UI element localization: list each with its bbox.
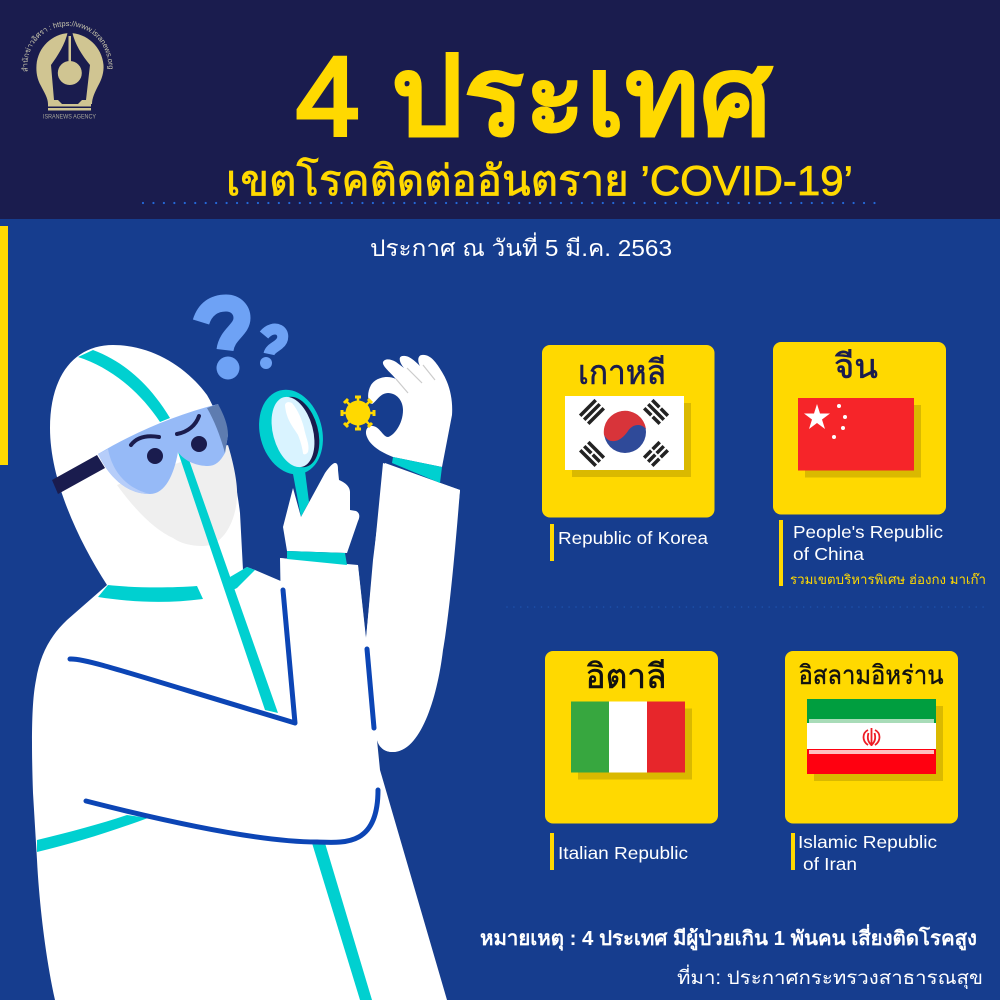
- country name: อิสลามอิหร่าน: [798, 660, 944, 690]
- label: Republic of Korea: [550, 524, 708, 561]
- label: Islamic Republic of Iran: [791, 832, 937, 874]
- dotted divider: [507, 606, 988, 608]
- logo: Isranews Agency: ISRANEWS AGENCY: [43, 114, 97, 120]
- logo: Isranews Agency: สำนักข่าวอิศรา : https://www.isranews.org: [21, 20, 113, 72]
- left accent bar: [0, 226, 8, 465]
- suit body: [32, 463, 460, 1000]
- card: Korea: [542, 345, 714, 518]
- country name: จีน: [834, 348, 878, 386]
- goggles: [52, 404, 228, 494]
- left glove: [283, 463, 359, 565]
- logo: Isranews Agency: [21, 20, 113, 120]
- flag: Italy: [571, 702, 692, 780]
- header band: [0, 0, 1000, 219]
- icon: magnifying glass: [250, 382, 332, 517]
- note: หมายเหตุ : 4 ประเทศ มีผู้ป่วยเกิน 1 พันคน เสี่ยงติดโรคสูง: [480, 923, 977, 952]
- illustration: health worker in protective suit: [32, 345, 460, 1000]
- icon: large question mark: [201, 303, 242, 380]
- card: Italy: [545, 651, 718, 824]
- label: People's Republic of China: รวมเขตบริหารพิเศษ ฮ่องกง มาเก๊า: [790, 572, 986, 587]
- flag: Iran: [807, 699, 943, 781]
- label: Republic of Korea: Republic of Korea: [558, 528, 708, 548]
- country name: เกาหลี: [578, 354, 666, 392]
- icon: virus: [341, 396, 375, 430]
- icon: small question mark: [260, 329, 283, 369]
- label: People's Republic of China: of China: [793, 544, 864, 564]
- announcement date: ประกาศ ณ วันที่ 5 มี.ค. 2563: [370, 232, 672, 261]
- chest strap: [178, 452, 278, 713]
- shoulder strap: [230, 567, 255, 590]
- label: Islamic Republic of Iran: Islamic Republic: [798, 832, 937, 852]
- flag: China: [798, 398, 921, 478]
- label: Islamic Republic of Iran: of Iran: [803, 854, 857, 874]
- label: People's Republic of China: People's Republic: [793, 522, 943, 542]
- left sleeve: [280, 558, 377, 740]
- sleeve seams: [70, 590, 378, 842]
- right glove with OK gesture: [366, 355, 452, 483]
- lower strap: [312, 843, 372, 1000]
- card: Iran: [785, 651, 958, 824]
- source: ที่มา: ประกาศกระทรวงสาธารณสุข: [677, 964, 983, 990]
- hood strap: [78, 350, 170, 422]
- label: Italian Republic: [550, 833, 688, 870]
- hood: [50, 345, 243, 610]
- face mask: [117, 445, 237, 546]
- country name: อิตาลี: [586, 658, 666, 696]
- right sleeve: [366, 463, 460, 752]
- collar: [98, 585, 203, 602]
- waist strap: [37, 815, 148, 852]
- title: 4 ประเทศ: [296, 34, 772, 159]
- label: Italian Republic: Italian Republic: [558, 843, 688, 863]
- flag: South Korea: [565, 396, 691, 477]
- card: China: [773, 342, 946, 514]
- label: People's Republic of China: [779, 520, 986, 587]
- subtitle: เขตโรคติดต่ออันตราย ’COVID-19’: [226, 156, 853, 204]
